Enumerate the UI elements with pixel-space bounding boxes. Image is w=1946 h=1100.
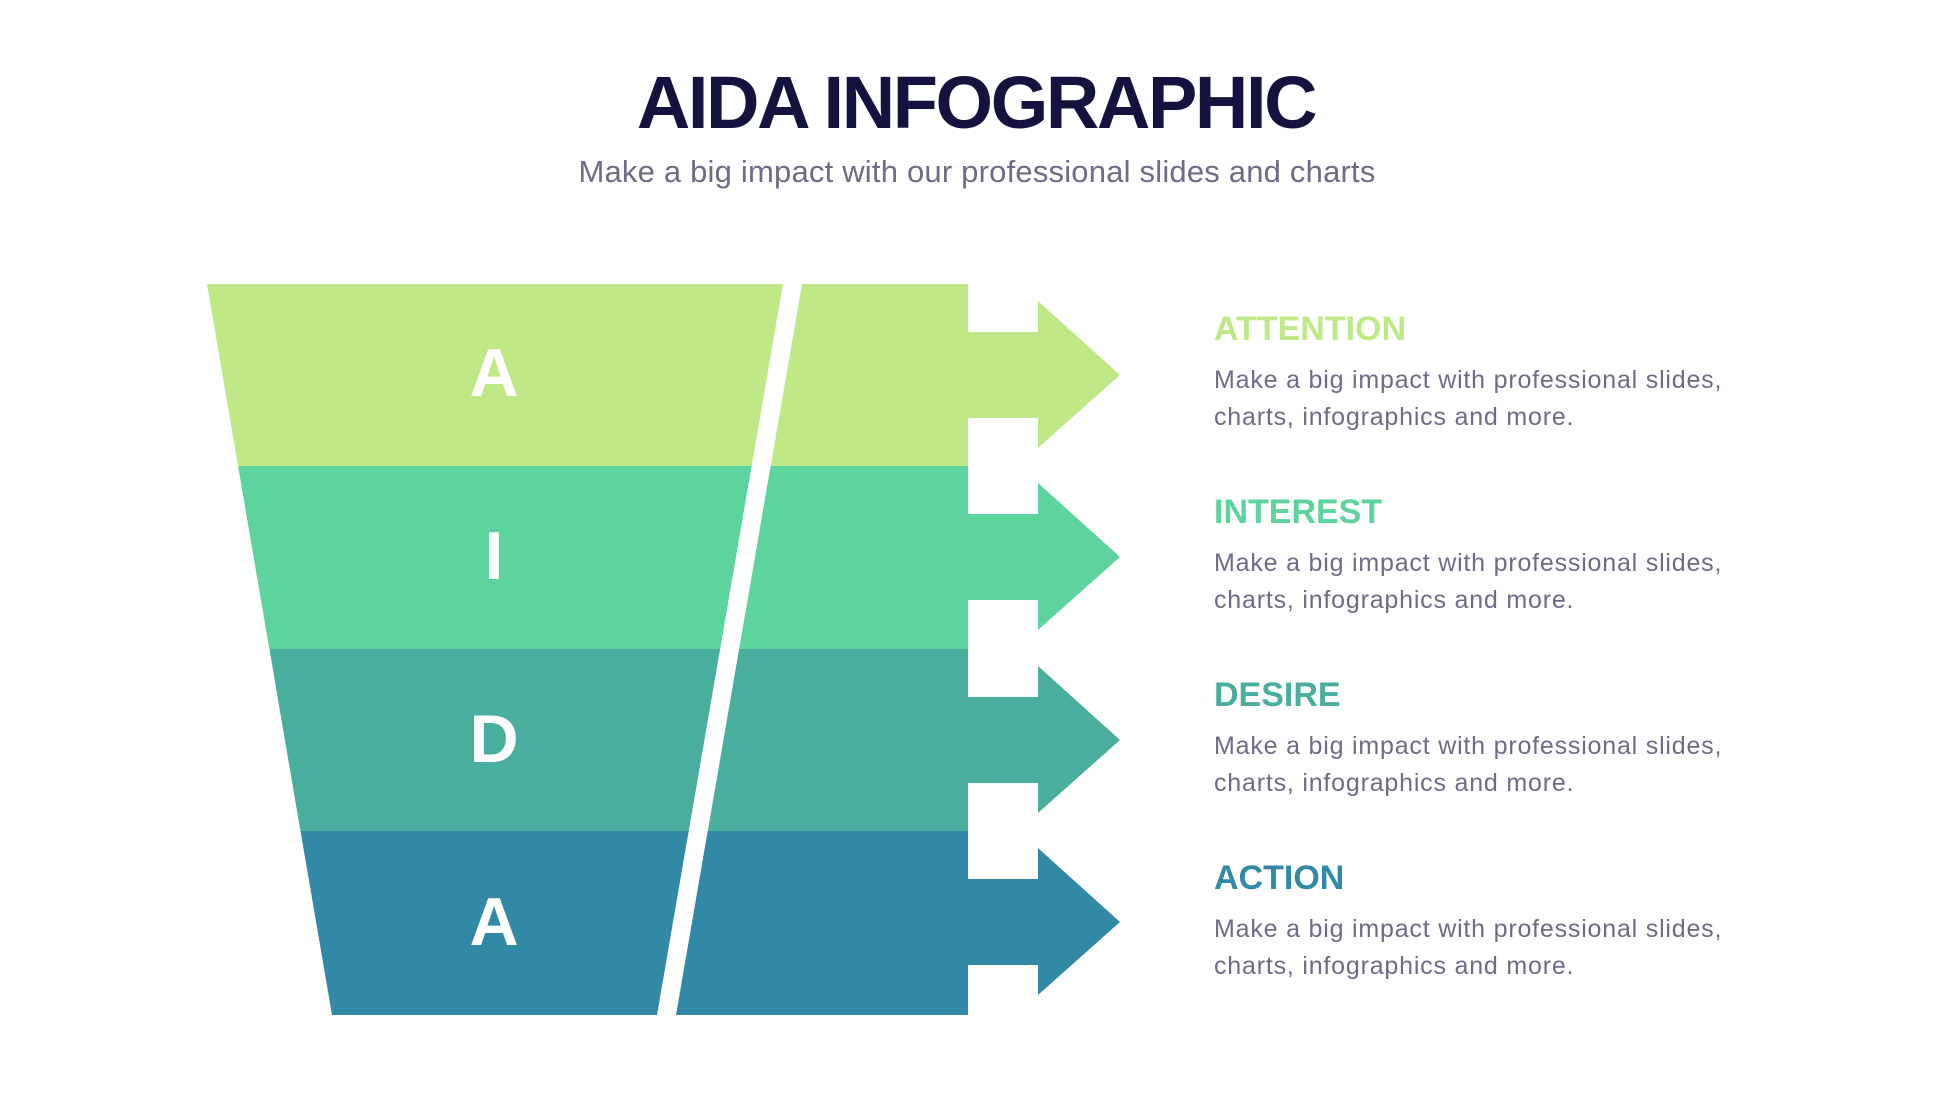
text block: interest: INTEREST [1214,493,1382,531]
text block: interest: charts, infographics and more. [1214,586,1574,614]
funnel band: desire [269,649,1120,832]
text block: interest [1214,493,1722,614]
text block: action [1214,859,1722,980]
text block: desire: charts, infographics and more. [1214,769,1574,797]
text block: attention: ATTENTION [1214,310,1406,348]
text block: desire [1214,676,1722,797]
funnel band: attention [207,284,1120,466]
funnel band: attention: A [469,335,519,411]
funnel [207,284,1120,1015]
text block: desire: Make a big impact with professional slides, [1214,732,1722,760]
subtitle: Make a big impact with our professional slides and charts [578,154,1376,189]
text block: attention [1214,310,1722,431]
text block: attention: Make a big impact with professional slides, [1214,366,1722,394]
text block: action: charts, infographics and more. [1214,952,1574,980]
funnel band: interest: I [485,518,503,594]
funnel band: interest [238,466,1120,650]
funnel band: desire: D [469,701,519,777]
text block: desire: DESIRE [1214,676,1341,714]
title: AIDA INFOGRAPHIC [637,61,1316,144]
text block: attention: charts, infographics and more. [1214,403,1574,431]
funnel band: action: A [469,884,519,960]
text block: interest: Make a big impact with professional slides, [1214,549,1722,577]
text block: action: Make a big impact with professional slides, [1214,915,1722,943]
text block: action: ACTION [1214,859,1344,897]
funnel band: action [300,831,1120,1015]
